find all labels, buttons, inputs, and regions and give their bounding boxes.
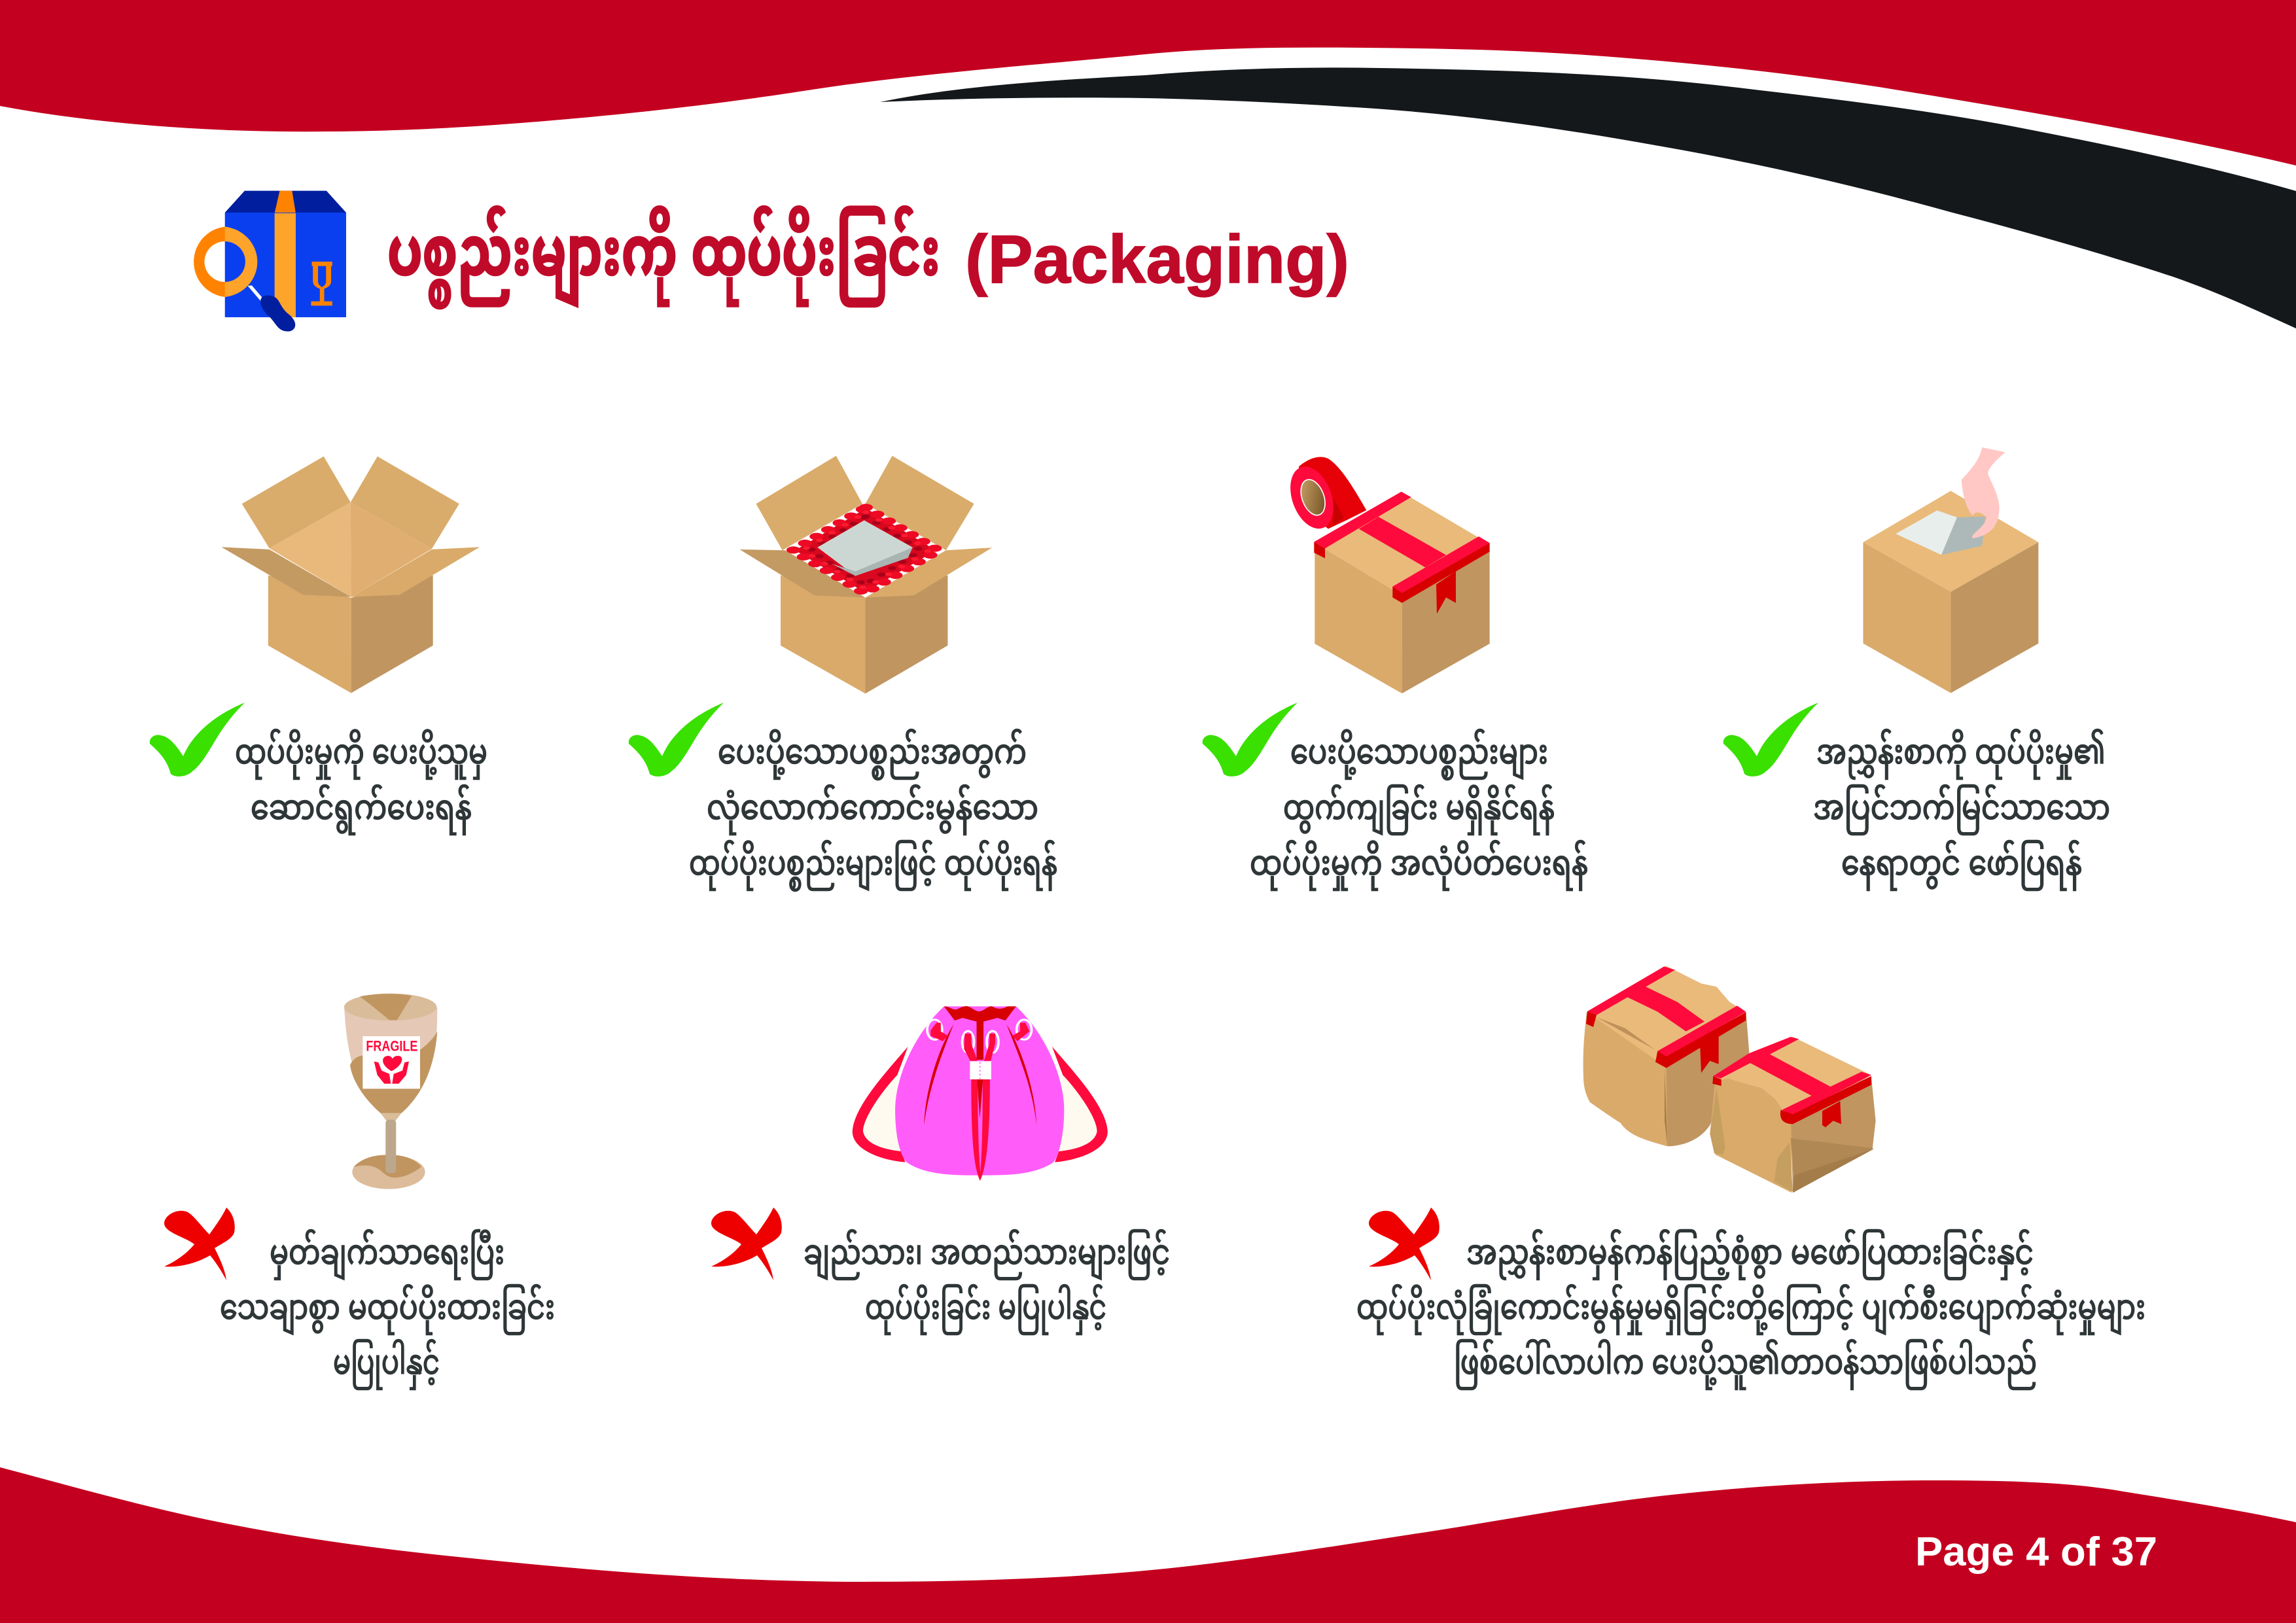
cross mark 1 [164,1208,235,1280]
text: step 3: ထွက်ကျခြင်း မရှိနိုင်ရန် [1283,784,1555,836]
text: step 3 [1250,728,1588,891]
text: step 4: အပြင်ဘက်မြင်သာသော [1813,784,2110,835]
text: step 3: ပေးပို့သောပစ္စည်းများ [1290,728,1548,780]
icon: box sealed with red tape and roll [1282,457,1490,693]
text: warning 3: ထုပ်ပိုးလုံခြုံကောင်းမွန်မှုမရှိခြင်းတို့ကြောင့် ပျက်စီးပျောက်ဆုံးမှုများ [1356,1283,2146,1336]
cross mark 2 [711,1208,782,1280]
title [387,205,1349,309]
text: step 2: ထုပ်ပိုးပစ္စည်းများဖြင့် ထုပ်ပိုးရန် [689,839,1057,892]
top red wave band [0,0,2296,166]
bottom red wave band [0,1467,2296,1623]
title icon: box with magnifier [194,191,346,332]
icon: open empty box [221,457,480,693]
text: step 1: ဆောင်ရွက်ပေးရန် [251,784,472,835]
icon: fragile wine glass: FRAGILE [366,1038,417,1055]
tape roll [1282,457,1366,534]
icon: pink cloth bag [853,1006,1108,1181]
title: ပစ္စည်းများကို ထုပ်ပိုးခြင်း [387,205,940,309]
text: step 1 [235,728,487,835]
text: step 2 [689,728,1057,892]
text: step 4: နေရာတွင် ဖော်ပြရန် [1841,839,2082,891]
text: warning 3: အညွှန်းစာမှန်ကန်ပြည့်စုံစွာ မဖော်ပြထားခြင်းနှင့် [1466,1229,2034,1280]
text: warning 1 [220,1229,555,1390]
text: warning 1: မှတ်ချက်သာရေးပြီး [270,1229,504,1281]
text: warning 1: မပြုပါနှင့် [333,1338,440,1390]
top black swoosh [880,67,2296,328]
text: warning 3: ဖြစ်ပေါ်လာပါက ပေးပို့သူ၏တာဝန်သာဖြစ်ပါသည် [1454,1338,2037,1390]
check mark 1 [150,703,245,777]
check mark 3 [1203,703,1298,777]
text: step 4: အညွှန်းစာကို ထုပ်ပိုးမှု၏ [1816,728,2106,780]
text: step 3: ထုပ်ပိုးမှုကို အလုံပိတ်ပေးရန် [1250,839,1588,891]
damaged box: large [1583,966,1749,1146]
damaged box: small [1710,1037,1876,1193]
page number: Page 4 of 37 [1915,1529,2157,1575]
icon: damaged boxes [1583,966,1876,1193]
text: warning 2 [804,1229,1170,1335]
text: warning 2: ထုပ်ပိုးခြင်း မပြုပါနှင့် [865,1283,1106,1335]
icon: fragile wine glass [344,994,437,1189]
text: step 4 [1813,728,2110,891]
text: warning 2: ချည်သား၊ အထည်သားများဖြင့် [804,1229,1170,1281]
title: (Packaging) [965,222,1349,298]
text: step 2: လုံလောက်ကောင်းမွန်သော [707,784,1038,835]
check mark 2 [629,703,724,777]
text: step 1: ထုပ်ပိုးမှုကို ပေးပို့သူမှ [235,728,487,780]
icon: box with label and hand [1863,447,2038,693]
text: warning 3 [1356,1229,2146,1390]
text: step 2: ပေးပို့သောပစ္စည်းအတွက် [718,728,1027,780]
icon: open box with red filling [740,456,992,693]
check mark 4 [1723,703,1818,777]
cross mark 3 [1369,1208,1439,1280]
text: warning 1: သေချာစွာ မထုပ်ပိုးထားခြင်း [220,1283,555,1336]
